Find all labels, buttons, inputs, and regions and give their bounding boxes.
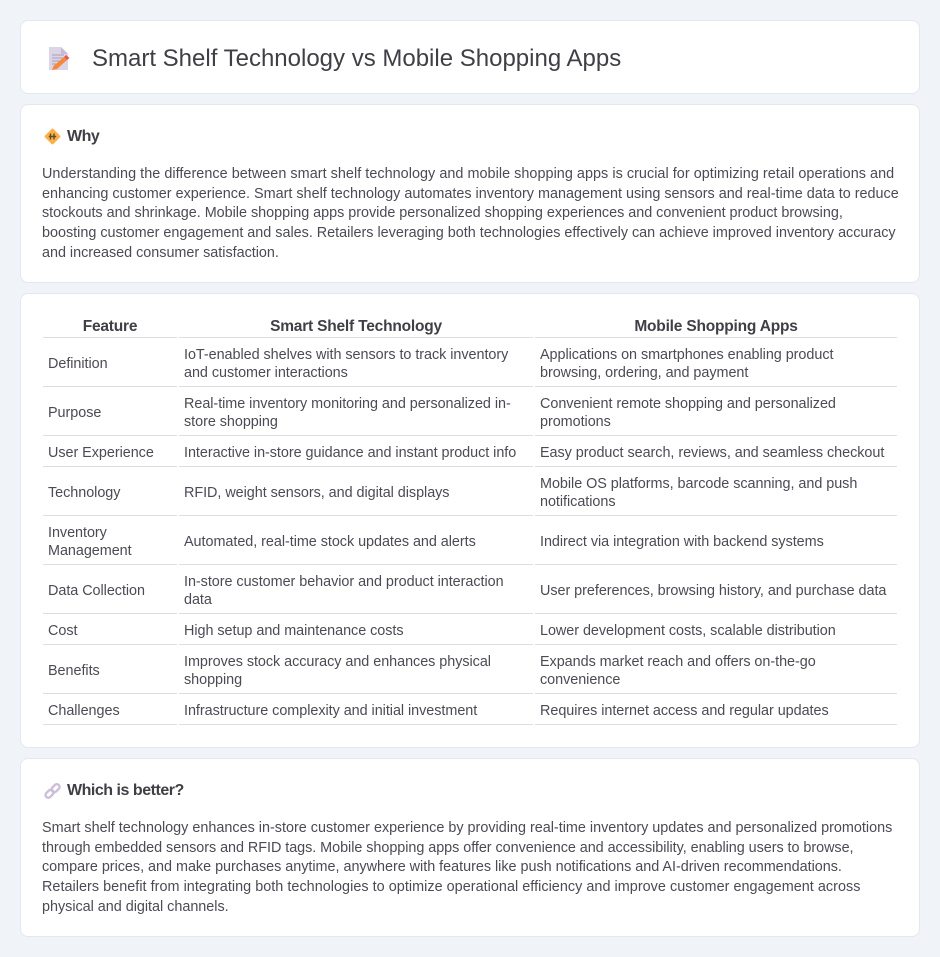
comparison table: Inventory [48,525,107,541]
text block: which is better: physical and digital channels. [42,899,229,915]
comparison table: Technology [48,485,120,501]
icon: warning diamond [44,128,60,144]
comparison table: Interactive in-store guidance and instant product info [184,445,516,461]
comparison table: Cost [48,623,77,639]
comparison table: In-store customer behavior and product interaction [184,574,504,590]
comparison table: Data Collection [48,583,145,599]
comparison table: store shopping [184,414,278,430]
comparison table: RFID, weight sensors, and digital displays [184,485,449,501]
comparison table: Real-time inventory monitoring and personalized in- [184,396,511,412]
comparison table: IoT-enabled shelves with sensors to track inventory [184,347,508,363]
comparison table: promotions [540,414,611,430]
panel: title header [20,20,920,94]
comparison table: browsing, ordering, and payment [540,365,748,381]
text block: why [42,166,899,261]
comparison table: Easy product search, reviews, and seamless checkout [540,445,884,461]
text block: which is better [42,820,892,915]
comparison table: Indirect via integration with backend systems [540,534,824,550]
text block: which is better: Smart shelf technology enhances in-store customer experience by providing real-time inventory updates and personalized promotions [42,820,892,836]
text block: which is better: compare prices, and make purchases anytime, anywhere with features like push notifications and AI-driven recommendations. [42,859,842,875]
text block: why: boosting customer engagement and sales. Retailers leveraging both technologies effectively can achieve improved inventory accuracy [42,225,896,241]
comparison table: Requires internet access and regular updates [540,703,829,719]
comparison table: Challenges [48,703,120,719]
heading: which is better: Which is better? [67,782,184,799]
comparison table: Improves stock accuracy and enhances physical [184,654,491,670]
panel: comparison table [20,293,920,748]
title: Smart Shelf Technology vs Mobile Shopping Apps [92,45,621,72]
comparison table: Automated, real-time stock updates and alerts [184,534,476,550]
comparison table: Feature [83,318,137,334]
comparison table: convenience [540,672,620,688]
comparison table: Purpose [48,405,101,421]
text block: which is better: through embedded sensors and RFID tags. Mobile shopping apps offer convenience and accessibility, enabling users to browse, [42,840,853,856]
comparison table: Infrastructure complexity and initial investment [184,703,477,719]
comparison table: shopping [184,672,242,688]
text block: why: Understanding the difference between smart shelf technology and mobile shopping apps is crucial for optimizing retail operations and [42,166,894,182]
panel: why [20,104,920,283]
text block: which is better: Retailers benefit from integrating both technologies to optimize operational efficiency and improve customer engagement across [42,879,860,895]
comparison table: High setup and maintenance costs [184,623,404,639]
comparison table: and customer interactions [184,365,348,381]
comparison table [43,318,897,725]
comparison table: Benefits [48,663,100,679]
comparison table: Smart Shelf Technology [270,318,442,334]
text block: why: stockouts and shrinkage. Mobile shopping apps provide personalized shopping experiences and convenient product browsing, [42,205,843,221]
comparison table: Convenient remote shopping and personalized [540,396,836,412]
comparison table: Management [48,543,132,559]
text block: why: and increased consumer satisfaction. [42,245,279,261]
comparison table: Mobile OS platforms, barcode scanning, and push [540,476,857,492]
comparison table: Applications on smartphones enabling product [540,347,833,363]
comparison table: Lower development costs, scalable distribution [540,623,836,639]
comparison table: User Experience [48,445,154,461]
comparison table: Definition [48,356,108,372]
panel: which is better [20,758,920,937]
comparison table: User preferences, browsing history, and purchase data [540,583,886,599]
comparison table: Mobile Shopping Apps [634,318,798,334]
comparison table: Expands market reach and offers on-the-go [540,654,816,670]
comparison table: notifications [540,494,615,510]
comparison table: data [184,592,212,608]
heading: why: Why [67,128,99,145]
icon: memo with pencil [49,47,70,70]
icon: chain link [44,783,61,799]
text block: why: enhancing customer experience. Smart shelf technology automates inventory management using sensors and real-time data to reduce [42,186,899,202]
